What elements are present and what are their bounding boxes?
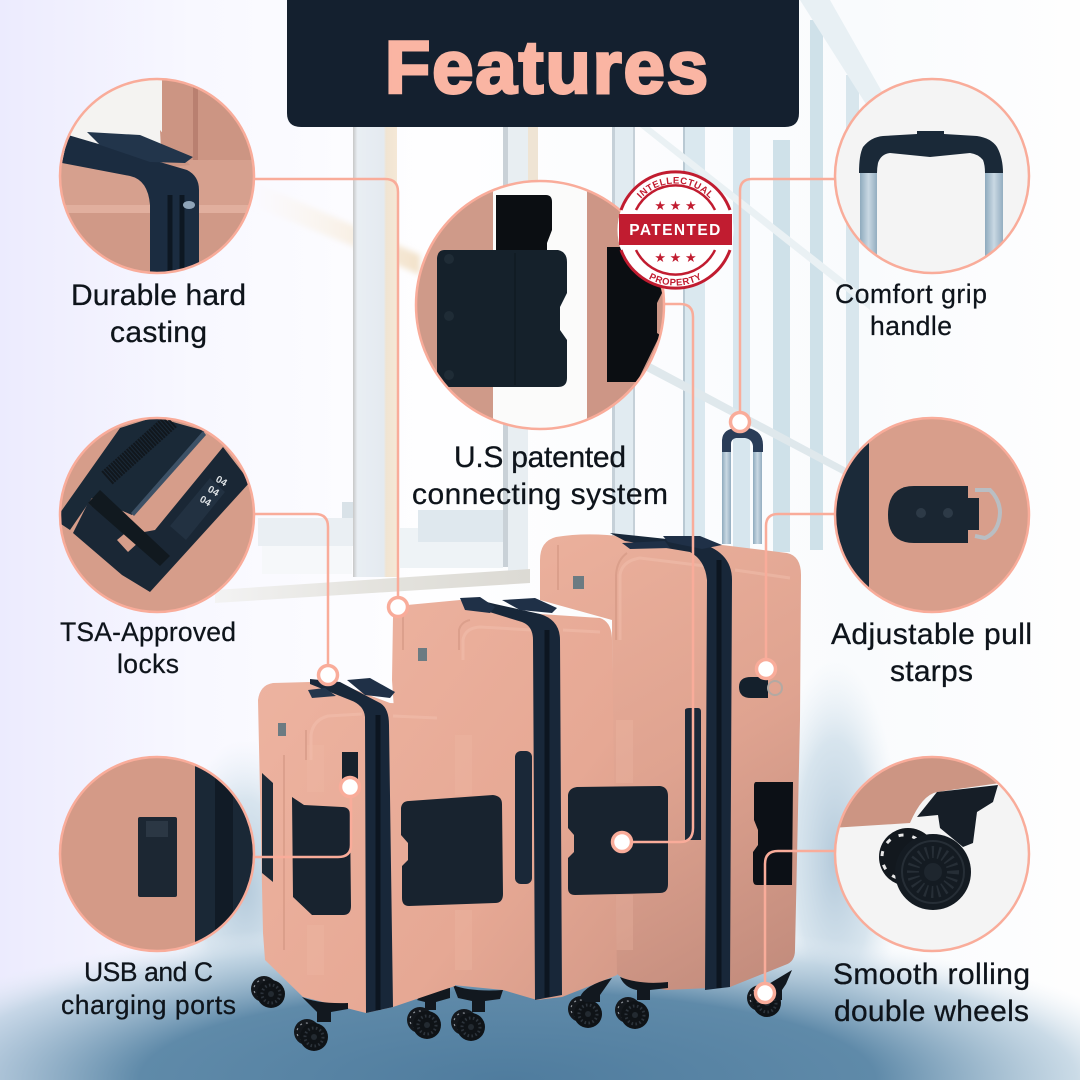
badge: patented stamp <box>618 170 734 290</box>
panel: adjustable pull straps <box>831 418 1032 688</box>
panel: TSA-approved locks: 04 <box>198 494 213 509</box>
handle <box>722 428 763 544</box>
panel: TSA-approved locks <box>55 417 255 679</box>
label <box>833 958 1030 1028</box>
badge: patented stamp: PROPERTY <box>649 272 700 286</box>
label: Durable hard <box>71 279 246 312</box>
label: Adjustable pull <box>831 618 1032 651</box>
label: Comfort grip <box>835 279 987 309</box>
label <box>71 279 246 349</box>
title banner <box>287 0 799 127</box>
label <box>60 617 236 679</box>
label: TSA-Approved <box>60 617 236 647</box>
label: U.S patented <box>454 441 626 474</box>
label: locks <box>117 649 179 679</box>
panel: TSA-approved locks: 04 <box>205 484 221 499</box>
connector plate on large suitcase <box>568 786 668 895</box>
panel: USB and C charging ports <box>59 757 255 1020</box>
label: casting <box>110 316 207 349</box>
label: double wheels <box>834 995 1029 1028</box>
label <box>61 957 236 1020</box>
label: Smooth rolling <box>833 958 1030 991</box>
panel: durable hard casting <box>59 78 257 349</box>
badge: patented stamp: ★ ★ ★ <box>654 250 697 265</box>
label: connecting system <box>412 478 668 511</box>
small suitcase <box>251 678 503 1051</box>
medium suitcase <box>392 597 668 1041</box>
panel: smooth rolling double wheels <box>830 745 1030 1028</box>
badge: patented stamp: INTELLECTUAL <box>636 177 712 198</box>
label <box>831 618 1032 688</box>
marker dots <box>318 412 776 1002</box>
label <box>412 441 668 511</box>
connector plate on medium suitcase <box>401 795 503 906</box>
panel: connecting system <box>412 180 668 511</box>
badge: patented stamp: ★ ★ ★ <box>654 198 697 213</box>
title: Features <box>385 26 708 109</box>
label: USB and C <box>84 957 213 987</box>
label: charging ports <box>61 990 236 1020</box>
panel: TSA-approved locks: 04 <box>214 474 229 489</box>
connector lines <box>255 179 835 984</box>
label: handle <box>870 311 952 341</box>
label <box>835 279 987 341</box>
large suitcase <box>540 428 801 1029</box>
label: starps <box>890 655 973 688</box>
badge: patented stamp: PATENTED <box>629 222 722 239</box>
panel: comfort grip handle <box>835 79 1029 341</box>
